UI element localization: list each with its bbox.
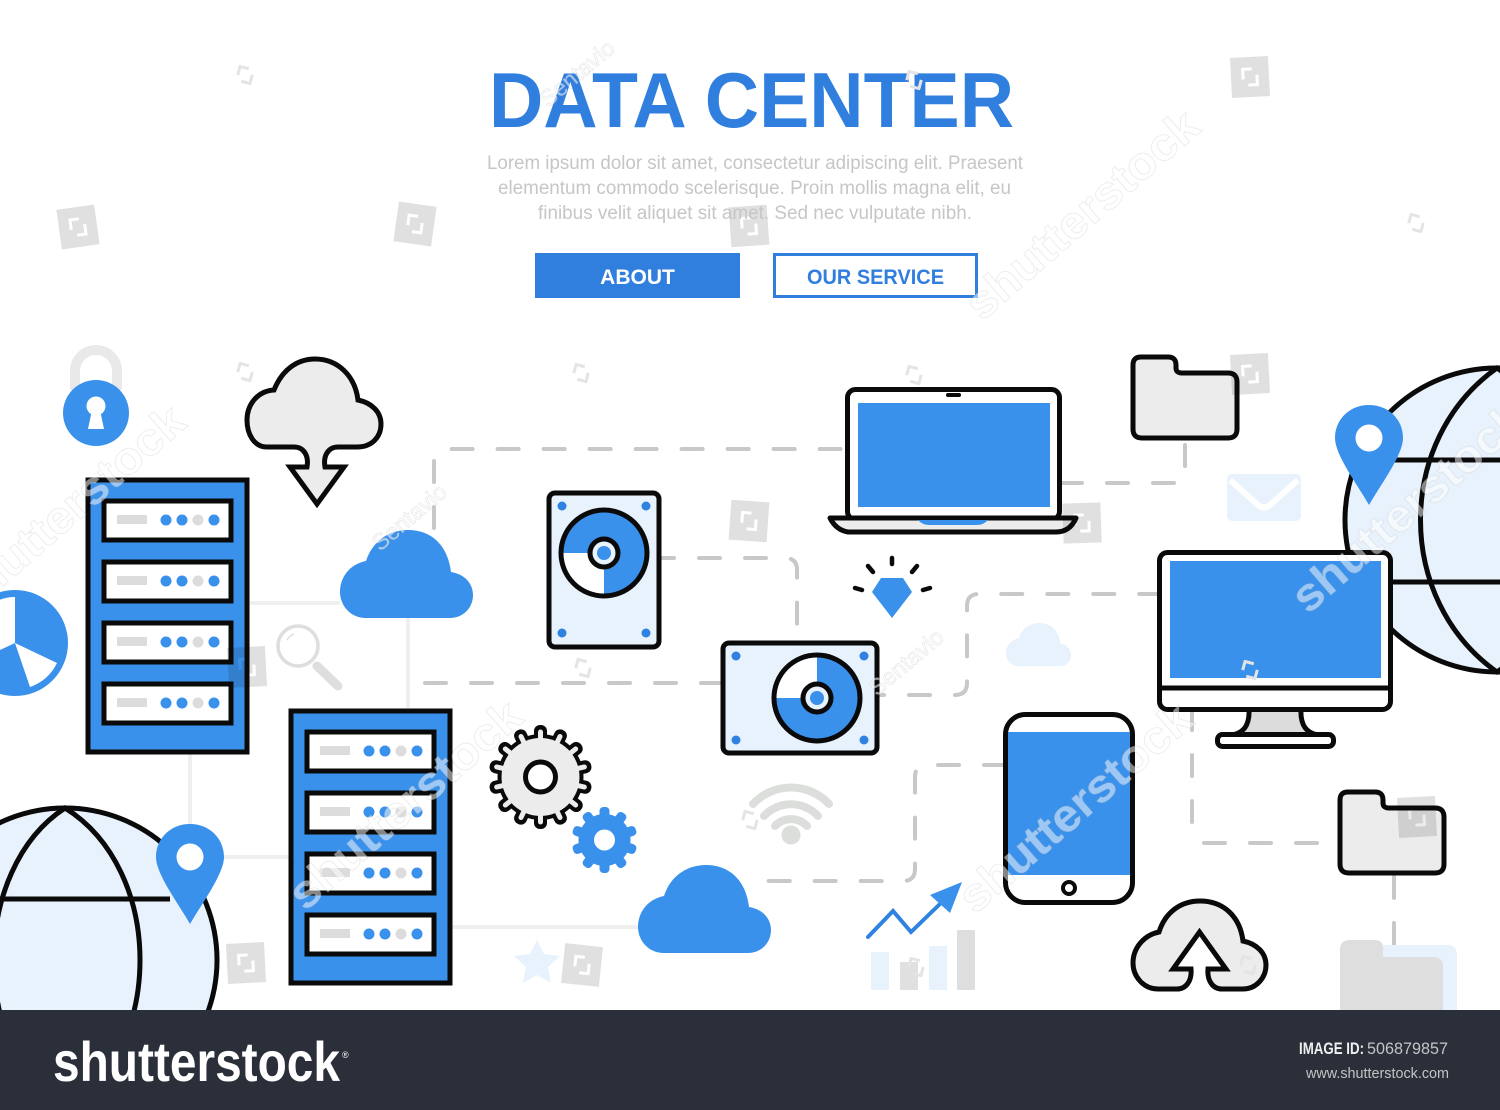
icon: cloud upload: [1133, 901, 1266, 989]
stock watermarks: Sentavio: [367, 478, 452, 556]
intro paragraph: finibus velit aliquet sit amet. Sed nec vulputate nibh.: [538, 203, 972, 224]
footer bar: 506879857: [1367, 1039, 1448, 1058]
title: DATA CENTER: [489, 56, 1014, 144]
icon: wifi: [753, 787, 829, 844]
icon: gem with sparkle: [855, 558, 930, 618]
globe: right: [1345, 368, 1500, 672]
button: our service: [774, 254, 976, 296]
stock watermarks: Sentavio: [864, 623, 949, 701]
stock watermarks: shutterstock: [277, 688, 532, 920]
cloud: faint: [1006, 623, 1071, 666]
icon: padlock: [63, 350, 129, 446]
server rack left: [88, 480, 247, 752]
icon: magnifier: [278, 626, 338, 686]
footer bar: IMAGE ID:: [1299, 1039, 1364, 1058]
icon: star: [514, 940, 560, 983]
button: our service: OUR SERVICE: [807, 266, 944, 289]
icon: location pin left: [156, 824, 224, 924]
icon: large gear: [488, 725, 593, 829]
button: about: [535, 253, 740, 298]
cloud: blue bottom: [638, 865, 771, 953]
intro paragraph: [487, 153, 1024, 224]
footer bar: ®: [342, 1050, 349, 1060]
icon: envelope: [1227, 474, 1301, 521]
icon: hard drive vertical: [549, 493, 659, 647]
chart: growth arrow with bars: [868, 882, 975, 990]
icon: folder top: [1133, 357, 1237, 438]
cloud: blue top: [340, 530, 473, 618]
icon: pie chart: [0, 590, 68, 696]
globe: bottom left: [0, 808, 217, 1110]
icon: location pin right: [1335, 405, 1403, 505]
footer bar: [0, 1010, 1500, 1110]
icon: laptop: [830, 390, 1076, 532]
icon: tablet: [1006, 714, 1132, 902]
button: about: ABOUT: [600, 266, 675, 289]
stock watermarks: Sentavio: [535, 34, 620, 112]
footer bar: www.shutterstock.com: [1305, 1065, 1449, 1082]
icon: desktop monitor: [1160, 552, 1390, 746]
intro paragraph: Lorem ipsum dolor sit amet, consectetur adipiscing elit. Praesent: [487, 153, 1024, 174]
icon: folder bottom: [1340, 792, 1444, 873]
icon: folder faint: [1340, 940, 1457, 1010]
icon: cloud download: [247, 359, 381, 504]
icon: hard drive horizontal: [723, 643, 877, 753]
stock watermarks: shutterstock: [947, 691, 1202, 923]
dashed connector lines: [425, 445, 1394, 944]
stock watermarks: shutterstock: [954, 98, 1209, 330]
icon: small blue gear: [572, 807, 637, 873]
footer bar: shutterstock: [53, 1030, 341, 1093]
intro paragraph: elementum commodo scelerisque. Proin mollis magna elit, eu: [498, 178, 1011, 199]
server rack center: [291, 711, 450, 983]
faint connector lines: [190, 603, 640, 927]
